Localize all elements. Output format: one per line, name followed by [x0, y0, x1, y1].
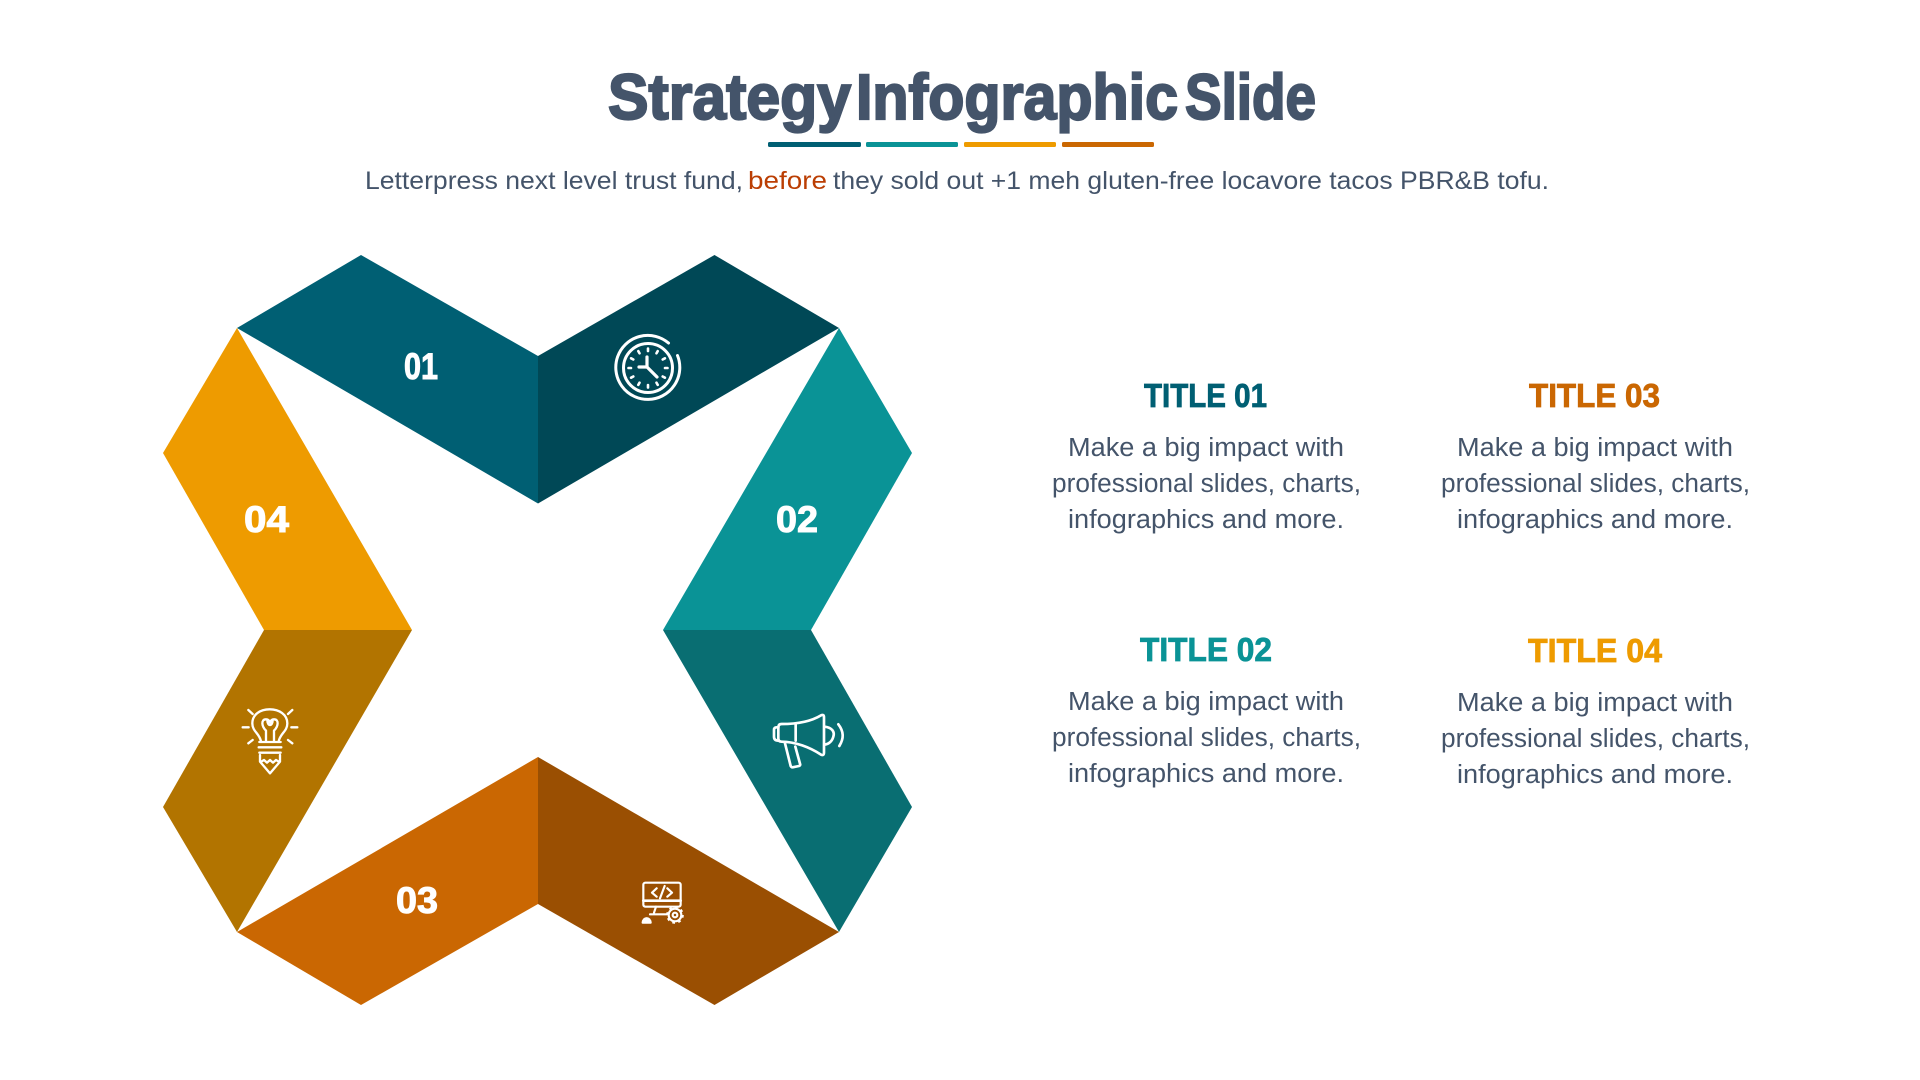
subtitle: [365, 167, 1549, 195]
icon: light bulb pencil: [243, 709, 297, 773]
text block: title 04: TITLE 04: [1528, 633, 1662, 670]
text block: title 02: Make a big impact with: [1068, 688, 1344, 716]
text block: title 01: Make a big impact with: [1068, 434, 1344, 462]
title: Slide: [1185, 61, 1316, 133]
number 01: 01: [404, 346, 438, 387]
number 03: 03: [396, 880, 438, 921]
subtitle: Letterpress next level trust fund,: [365, 167, 743, 195]
text block: title 01: professional slides, charts,: [1052, 470, 1361, 498]
text block: title 02: [1052, 632, 1361, 788]
text block: title 02: infographics and more.: [1068, 760, 1344, 788]
text block: title 03: professional slides, charts,: [1441, 470, 1750, 498]
text block: title 02: TITLE 02: [1140, 632, 1272, 669]
text block: title 02: professional slides, charts,: [1052, 724, 1361, 752]
text block: title 04: Make a big impact with: [1457, 689, 1733, 717]
number 02: 02: [776, 499, 818, 540]
subtitle: before: [748, 167, 827, 195]
text block: title 01: TITLE 01: [1144, 378, 1267, 415]
icon: clock: [616, 335, 680, 399]
segment 04: amber chevron: [163, 328, 412, 932]
title: [608, 61, 1316, 133]
title: Strategy: [608, 61, 851, 133]
segment 01: navy chevron: [237, 255, 839, 504]
text block: title 01: [1052, 378, 1361, 534]
text block: title 03: infographics and more.: [1457, 506, 1733, 534]
text block: title 01: infographics and more.: [1068, 506, 1344, 534]
number 04: 04: [244, 499, 289, 540]
text block: title 04: [1441, 633, 1750, 789]
title underline bars: [768, 142, 1154, 147]
text block: title 03: [1441, 378, 1750, 534]
text block: title 04: infographics and more.: [1457, 761, 1733, 789]
text block: title 04: professional slides, charts,: [1441, 725, 1750, 753]
subtitle: they sold out +1 meh gluten-free locavore tacos PBR&B tofu.: [833, 167, 1549, 195]
text block: title 03: Make a big impact with: [1457, 434, 1733, 462]
text block: title 03: TITLE 03: [1529, 378, 1660, 415]
title: Infographic: [856, 61, 1178, 133]
segment 02: teal chevron: [663, 328, 912, 932]
icon: megaphone: [774, 715, 843, 767]
icon: code monitor: [643, 883, 683, 923]
segment 03: orange chevron: [237, 757, 839, 1005]
